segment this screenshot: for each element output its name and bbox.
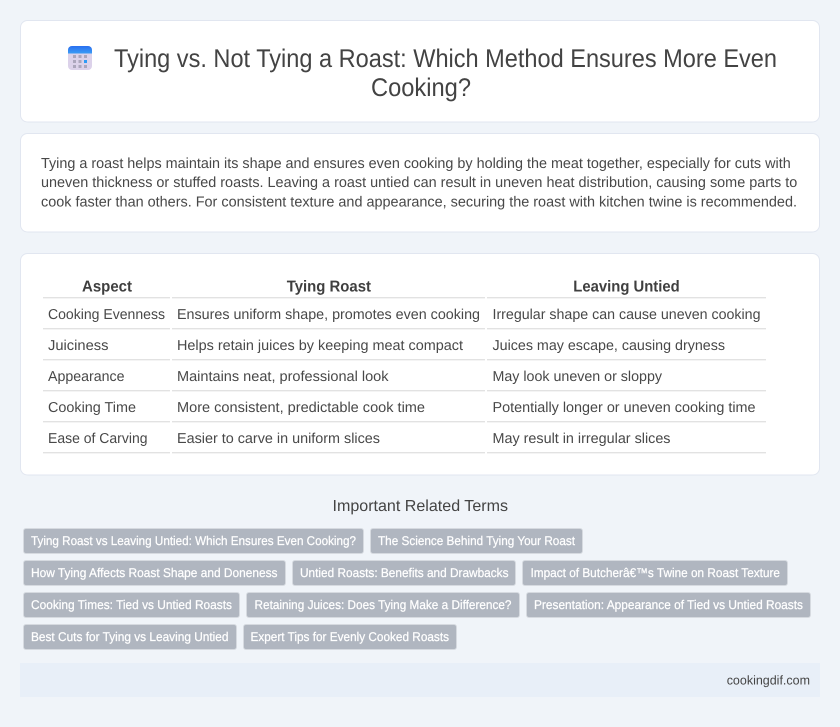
tag xyxy=(24,560,286,586)
table row: cooking evenness: Ensures uniform shape, promotes even cooking xyxy=(177,307,480,323)
table header: Aspect xyxy=(82,279,133,296)
related term tags xyxy=(24,528,810,650)
tag: Cooking Times: Tied vs Untied Roasts xyxy=(31,598,232,612)
tag: Retaining Juices: Does Tying Make a Difference? xyxy=(254,598,512,612)
tag xyxy=(24,528,364,554)
table row: appearance: May look uneven or sloppy xyxy=(492,369,663,385)
table row: cooking time: Potentially longer or uneven cooking time xyxy=(492,400,756,416)
table row: juiciness xyxy=(48,338,725,354)
table row: juiciness: Juiciness xyxy=(48,338,108,354)
tag xyxy=(24,624,236,650)
text block: description: cook faster than others. For consistent texture and appearance, securing the roast with kitchen twine is recommended. xyxy=(41,194,797,210)
table row: juiciness: Juices may escape, causing dryness xyxy=(492,338,725,354)
table row: cooking time xyxy=(48,400,756,416)
title: Tying vs. Not Tying a Roast: Which Method Ensures More Even xyxy=(114,45,777,73)
table row: ease of carving: Easier to carve in uniform slices xyxy=(177,431,380,447)
text block: description: Tying a roast helps maintain its shape and ensures even cooking by holding the meat together, especially for cuts with xyxy=(41,156,791,172)
tag: Untied Roasts: Benefits and Drawbacks xyxy=(300,566,508,580)
table row: cooking evenness xyxy=(48,307,760,323)
tag: Expert Tips for Evenly Cooked Roasts xyxy=(250,630,449,644)
table row: cooking evenness: Irregular shape can cause uneven cooking xyxy=(492,307,760,323)
tag xyxy=(246,592,520,618)
table header: Leaving Untied xyxy=(573,279,680,296)
tag: Tying Roast vs Leaving Untied: Which Ensures Even Cooking? xyxy=(31,534,356,548)
table row: juiciness: Helps retain juices by keeping meat compact xyxy=(177,338,463,354)
title: Cooking? xyxy=(371,74,471,102)
footer source: cookingdif.com xyxy=(727,672,810,687)
table row: appearance: Maintains neat, professional look xyxy=(177,369,389,385)
table row: ease of carving xyxy=(48,431,670,447)
table header xyxy=(82,279,680,296)
tag: Impact of Butcherâ€™s Twine on Roast Texture xyxy=(530,566,780,580)
table row: ease of carving: May result in irregular slices xyxy=(492,431,670,447)
footer xyxy=(20,663,820,697)
table row: ease of carving: Ease of Carving xyxy=(48,431,148,447)
tag xyxy=(244,624,456,650)
tag: Presentation: Appearance of Tied vs Untied Roasts xyxy=(534,598,803,612)
table header: Tying Roast xyxy=(287,279,372,296)
table row: appearance xyxy=(48,369,663,385)
tag xyxy=(522,560,788,586)
tag xyxy=(292,560,516,586)
icon: calendar xyxy=(68,46,92,70)
table row: cooking time: Cooking Time xyxy=(48,400,136,416)
tag xyxy=(370,528,582,554)
tag xyxy=(24,592,240,618)
text block: description: uneven thickness or stuffed roasts. Leaving a roast untied can result in uneven heat distribution, causing some parts to xyxy=(41,175,797,191)
tag: Best Cuts for Tying vs Leaving Untied xyxy=(31,630,228,644)
panel: description xyxy=(20,134,820,232)
table row: cooking time: More consistent, predictable cook time xyxy=(177,400,425,416)
table row: cooking evenness: Cooking Evenness xyxy=(48,307,165,323)
panel: comparison table xyxy=(20,254,820,475)
tag: The Science Behind Tying Your Roast xyxy=(378,534,575,548)
panel: header xyxy=(20,20,820,122)
tag xyxy=(526,592,810,618)
table row: appearance: Appearance xyxy=(48,369,124,385)
heading: related terms: Important Related Terms xyxy=(332,498,508,515)
tag: How Tying Affects Roast Shape and Doneness xyxy=(31,566,278,580)
